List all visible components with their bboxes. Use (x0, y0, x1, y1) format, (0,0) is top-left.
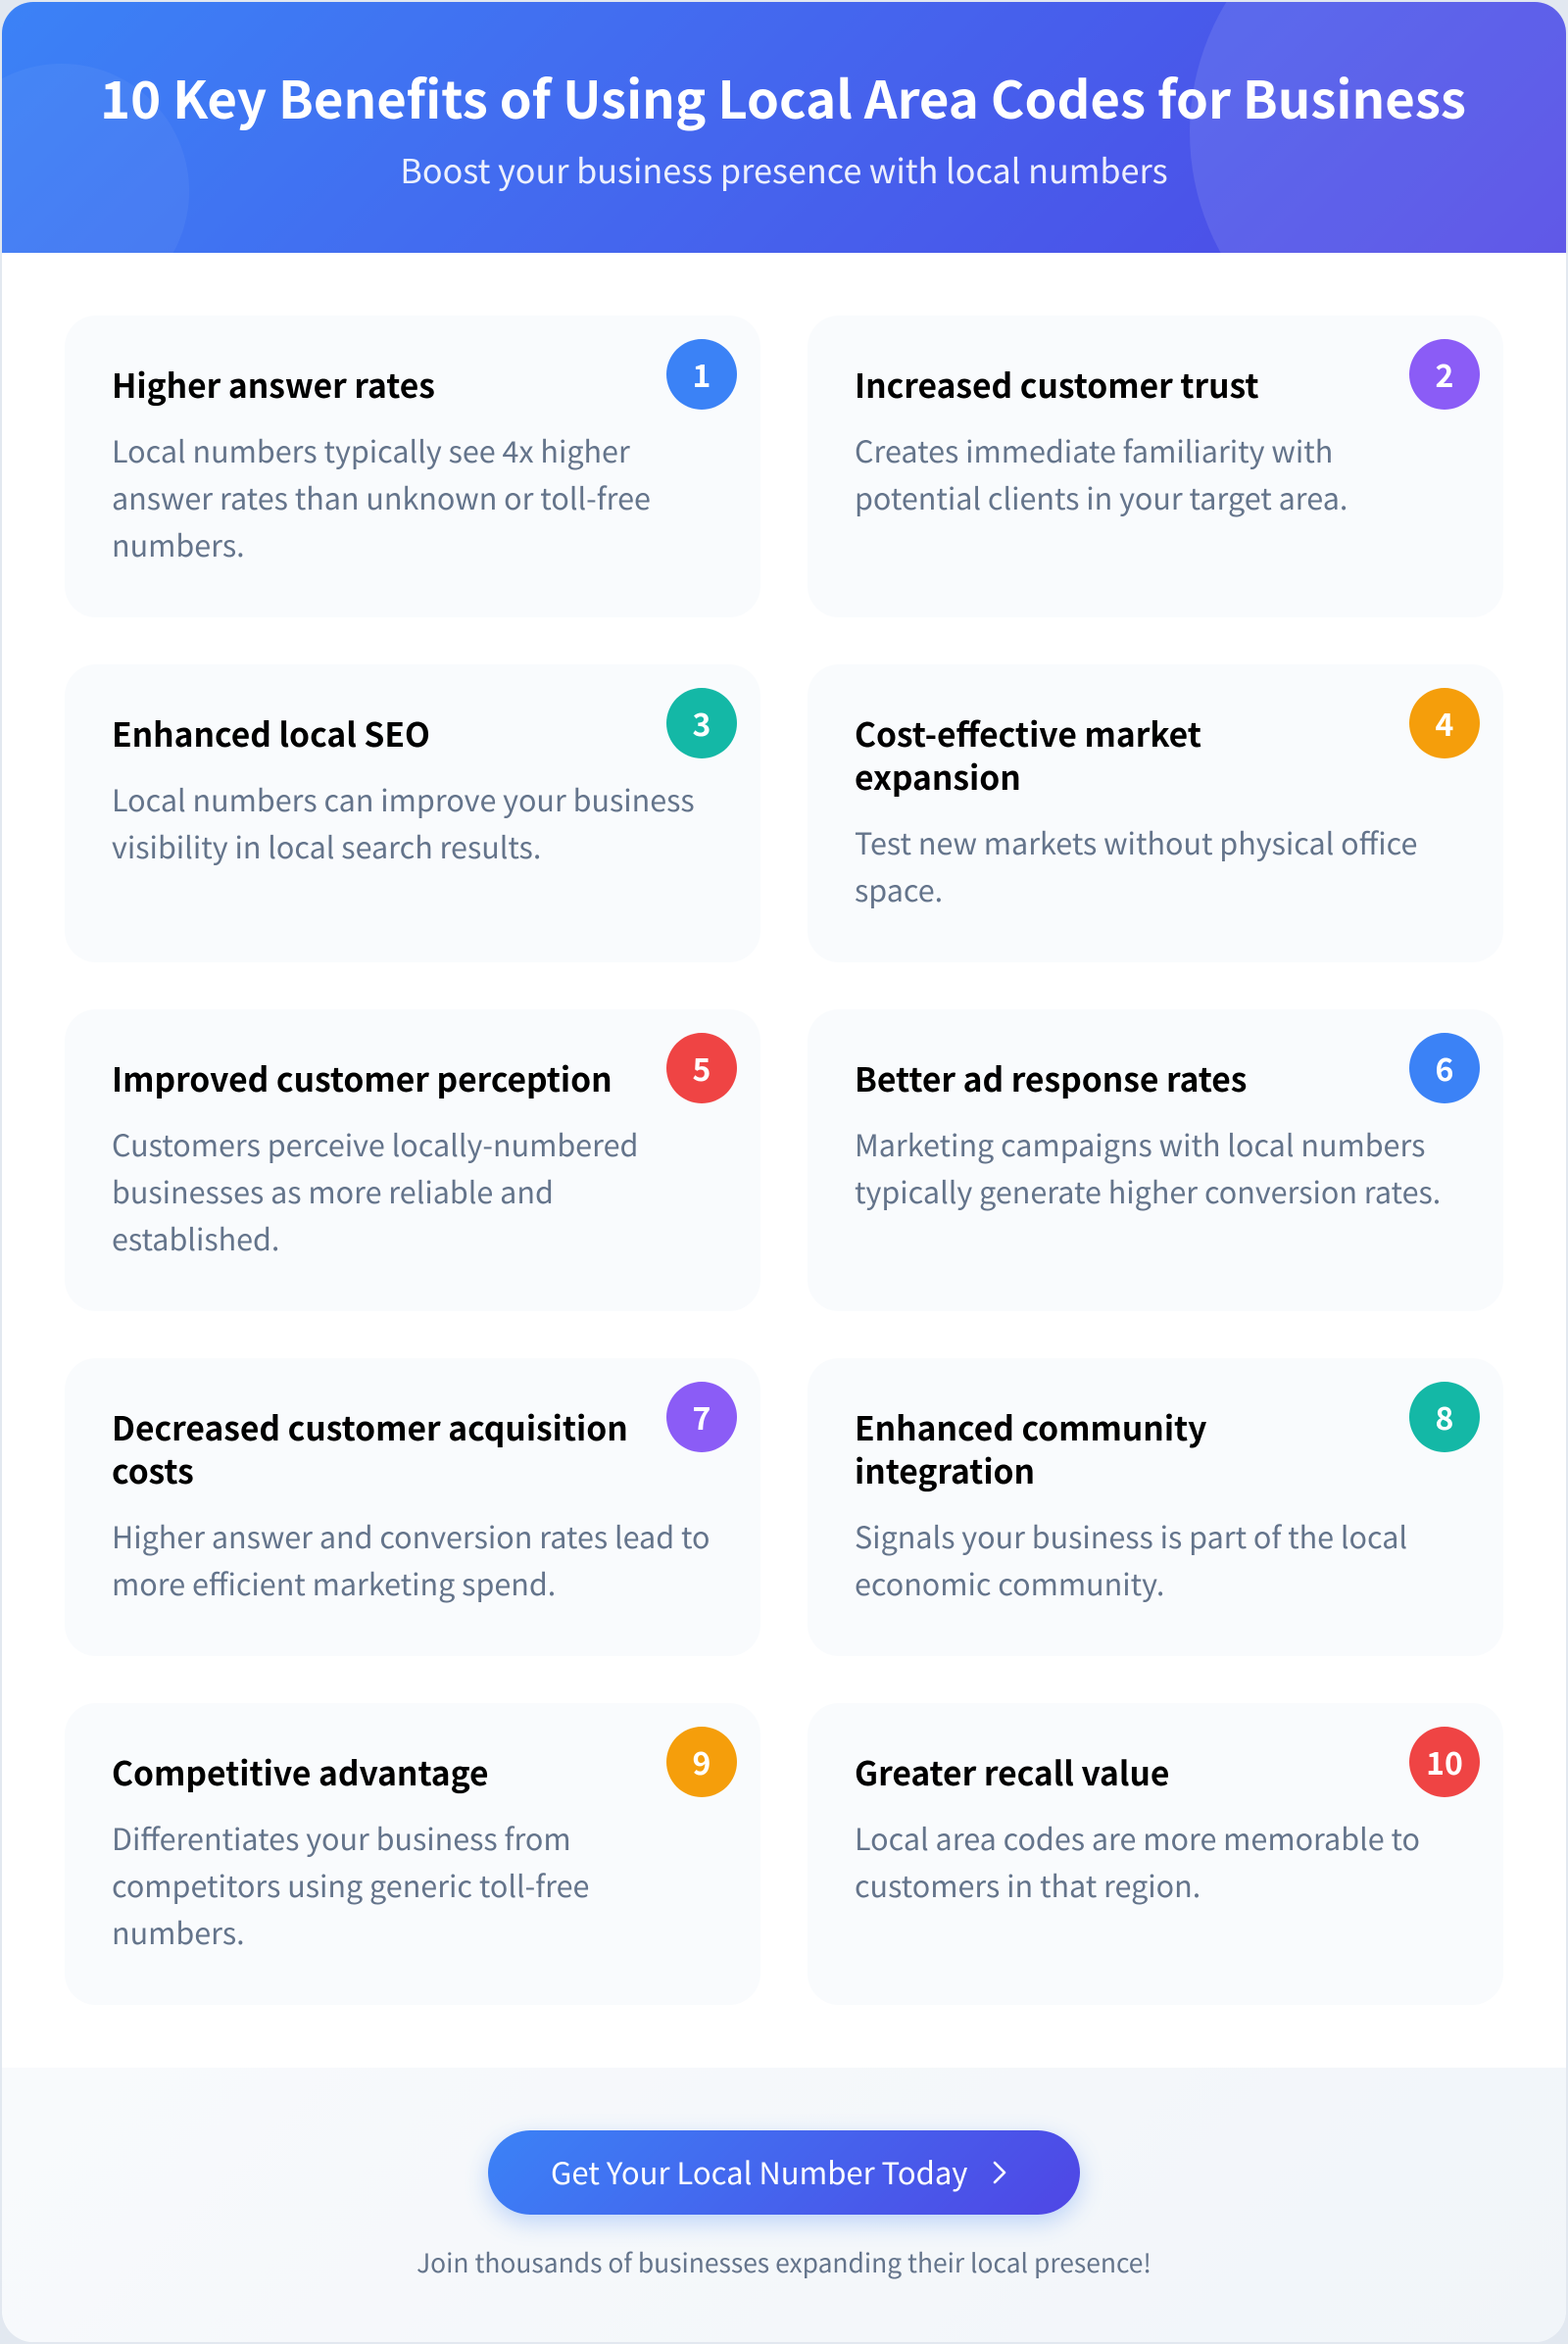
card 10 heading: Greater recall value (855, 1747, 1169, 1795)
badge 10 (1409, 1727, 1480, 1797)
card 1 text (112, 428, 651, 565)
badge 7 (666, 1382, 737, 1452)
CTA button: Get Your Local Number Today (551, 2149, 967, 2193)
title: 10 Key Benefits of Using Local Area Codes for Business (100, 60, 1466, 134)
card 5 text (112, 1122, 638, 1259)
card 9 text (112, 1816, 589, 1953)
card 7 text: Higher answer and conversion rates lead to (112, 1514, 710, 1557)
card 4 heading: Cost-effective market (855, 708, 1201, 757)
card 2 text: potential clients in your target area. (855, 475, 1348, 518)
badge 8 (1409, 1382, 1480, 1452)
card 2 text: Creates immediate familiarity with (855, 428, 1333, 471)
card 1 heading: Higher answer rates (112, 360, 435, 408)
badge 10: 10 (1426, 1739, 1463, 1784)
badge 7: 7 (693, 1394, 710, 1440)
card 3 text: Local numbers can improve your business (112, 777, 695, 820)
CTA button (488, 2130, 1080, 2215)
badge 9: 9 (693, 1739, 710, 1784)
card 4: cost-effective market expansion (808, 664, 1503, 962)
footer call to action (2, 2068, 1566, 2342)
card 5 text: businesses as more reliable and (112, 1169, 554, 1212)
card 3 text (112, 777, 695, 867)
badge 4 (1409, 688, 1480, 758)
badge 6: 6 (1436, 1046, 1453, 1091)
card 1: higher answer rates (65, 316, 760, 617)
card 4 text: space. (855, 867, 943, 910)
card 10 text: Local area codes are more memorable to (855, 1816, 1420, 1859)
card 4 text: Test new markets without physical office (855, 820, 1417, 863)
card 7 heading: Decreased customer acquisition (112, 1402, 628, 1450)
card 9: competitive advantage (65, 1703, 760, 2005)
card 9 text: competitors using generic toll-free (112, 1863, 589, 1906)
card 10 text (855, 1816, 1420, 1906)
card 2 heading: Increased customer trust (855, 360, 1259, 408)
card 8 text: Signals your business is part of the local (855, 1514, 1407, 1557)
card 2 text (855, 428, 1348, 518)
card 8 text (855, 1514, 1407, 1604)
subtitle: Boost your business presence with local numbers (400, 144, 1168, 193)
card 2: increased customer trust (808, 316, 1503, 617)
card 4 heading: expansion (855, 752, 1021, 800)
card 1 text: numbers. (112, 522, 245, 565)
card 3 text: visibility in local search results. (112, 824, 541, 867)
card 8 heading: integration (855, 1445, 1035, 1493)
card 5 text: Customers perceive locally-numbered (112, 1122, 638, 1165)
benefits grid (112, 339, 1480, 1953)
card 8 text: economic community. (855, 1561, 1164, 1604)
card 7 text: more efficient marketing spend. (112, 1561, 556, 1604)
card 5 text: established. (112, 1216, 279, 1259)
badge 5 (666, 1033, 737, 1103)
card 9 heading: Competitive advantage (112, 1747, 489, 1795)
card 5: improved customer perception (65, 1009, 760, 1311)
badge 1: 1 (693, 352, 710, 397)
header banner (2, 2, 1566, 253)
badge 8: 8 (1436, 1394, 1453, 1440)
card 10 text: customers in that region. (855, 1863, 1200, 1906)
card 6: better ad response rates (808, 1009, 1503, 1311)
card 6 text: Marketing campaigns with local numbers (855, 1122, 1425, 1165)
card 6 text: typically generate higher conversion rates. (855, 1169, 1441, 1212)
card 8 heading: Enhanced community (855, 1402, 1206, 1450)
card 1 text: answer rates than unknown or toll-free (112, 475, 651, 518)
badge 6 (1409, 1033, 1480, 1103)
card 3: enhanced local SEO (65, 664, 760, 962)
card 7 heading (112, 1402, 628, 1493)
card 8: enhanced community integration (808, 1358, 1503, 1656)
card 9 text: numbers. (112, 1910, 245, 1953)
badge 9 (666, 1727, 737, 1797)
footer note: Join thousands of businesses expanding their local presence! (416, 2242, 1152, 2280)
card 6 heading: Better ad response rates (855, 1053, 1247, 1101)
card 7: decreased customer acquisition costs (65, 1358, 760, 1656)
badge 1 (666, 339, 737, 410)
badge 3 (666, 688, 737, 758)
badge 2: 2 (1436, 352, 1453, 397)
badge 5: 5 (693, 1046, 710, 1091)
card 8 heading (855, 1402, 1206, 1493)
card 10: greater recall value (808, 1703, 1503, 2005)
card 7 text (112, 1514, 710, 1604)
card 3 heading: Enhanced local SEO (112, 708, 430, 757)
badge 2 (1409, 339, 1480, 410)
card 7 heading: costs (112, 1445, 194, 1493)
card 1 text: Local numbers typically see 4x higher (112, 428, 630, 471)
card 4 text (855, 820, 1417, 910)
badge 4: 4 (1436, 701, 1453, 746)
card 4 heading (855, 708, 1201, 800)
card 9 text: Differentiates your business from (112, 1816, 571, 1859)
badge 3: 3 (693, 701, 710, 746)
card 5 heading: Improved customer perception (112, 1053, 612, 1101)
card 6 text (855, 1122, 1441, 1212)
